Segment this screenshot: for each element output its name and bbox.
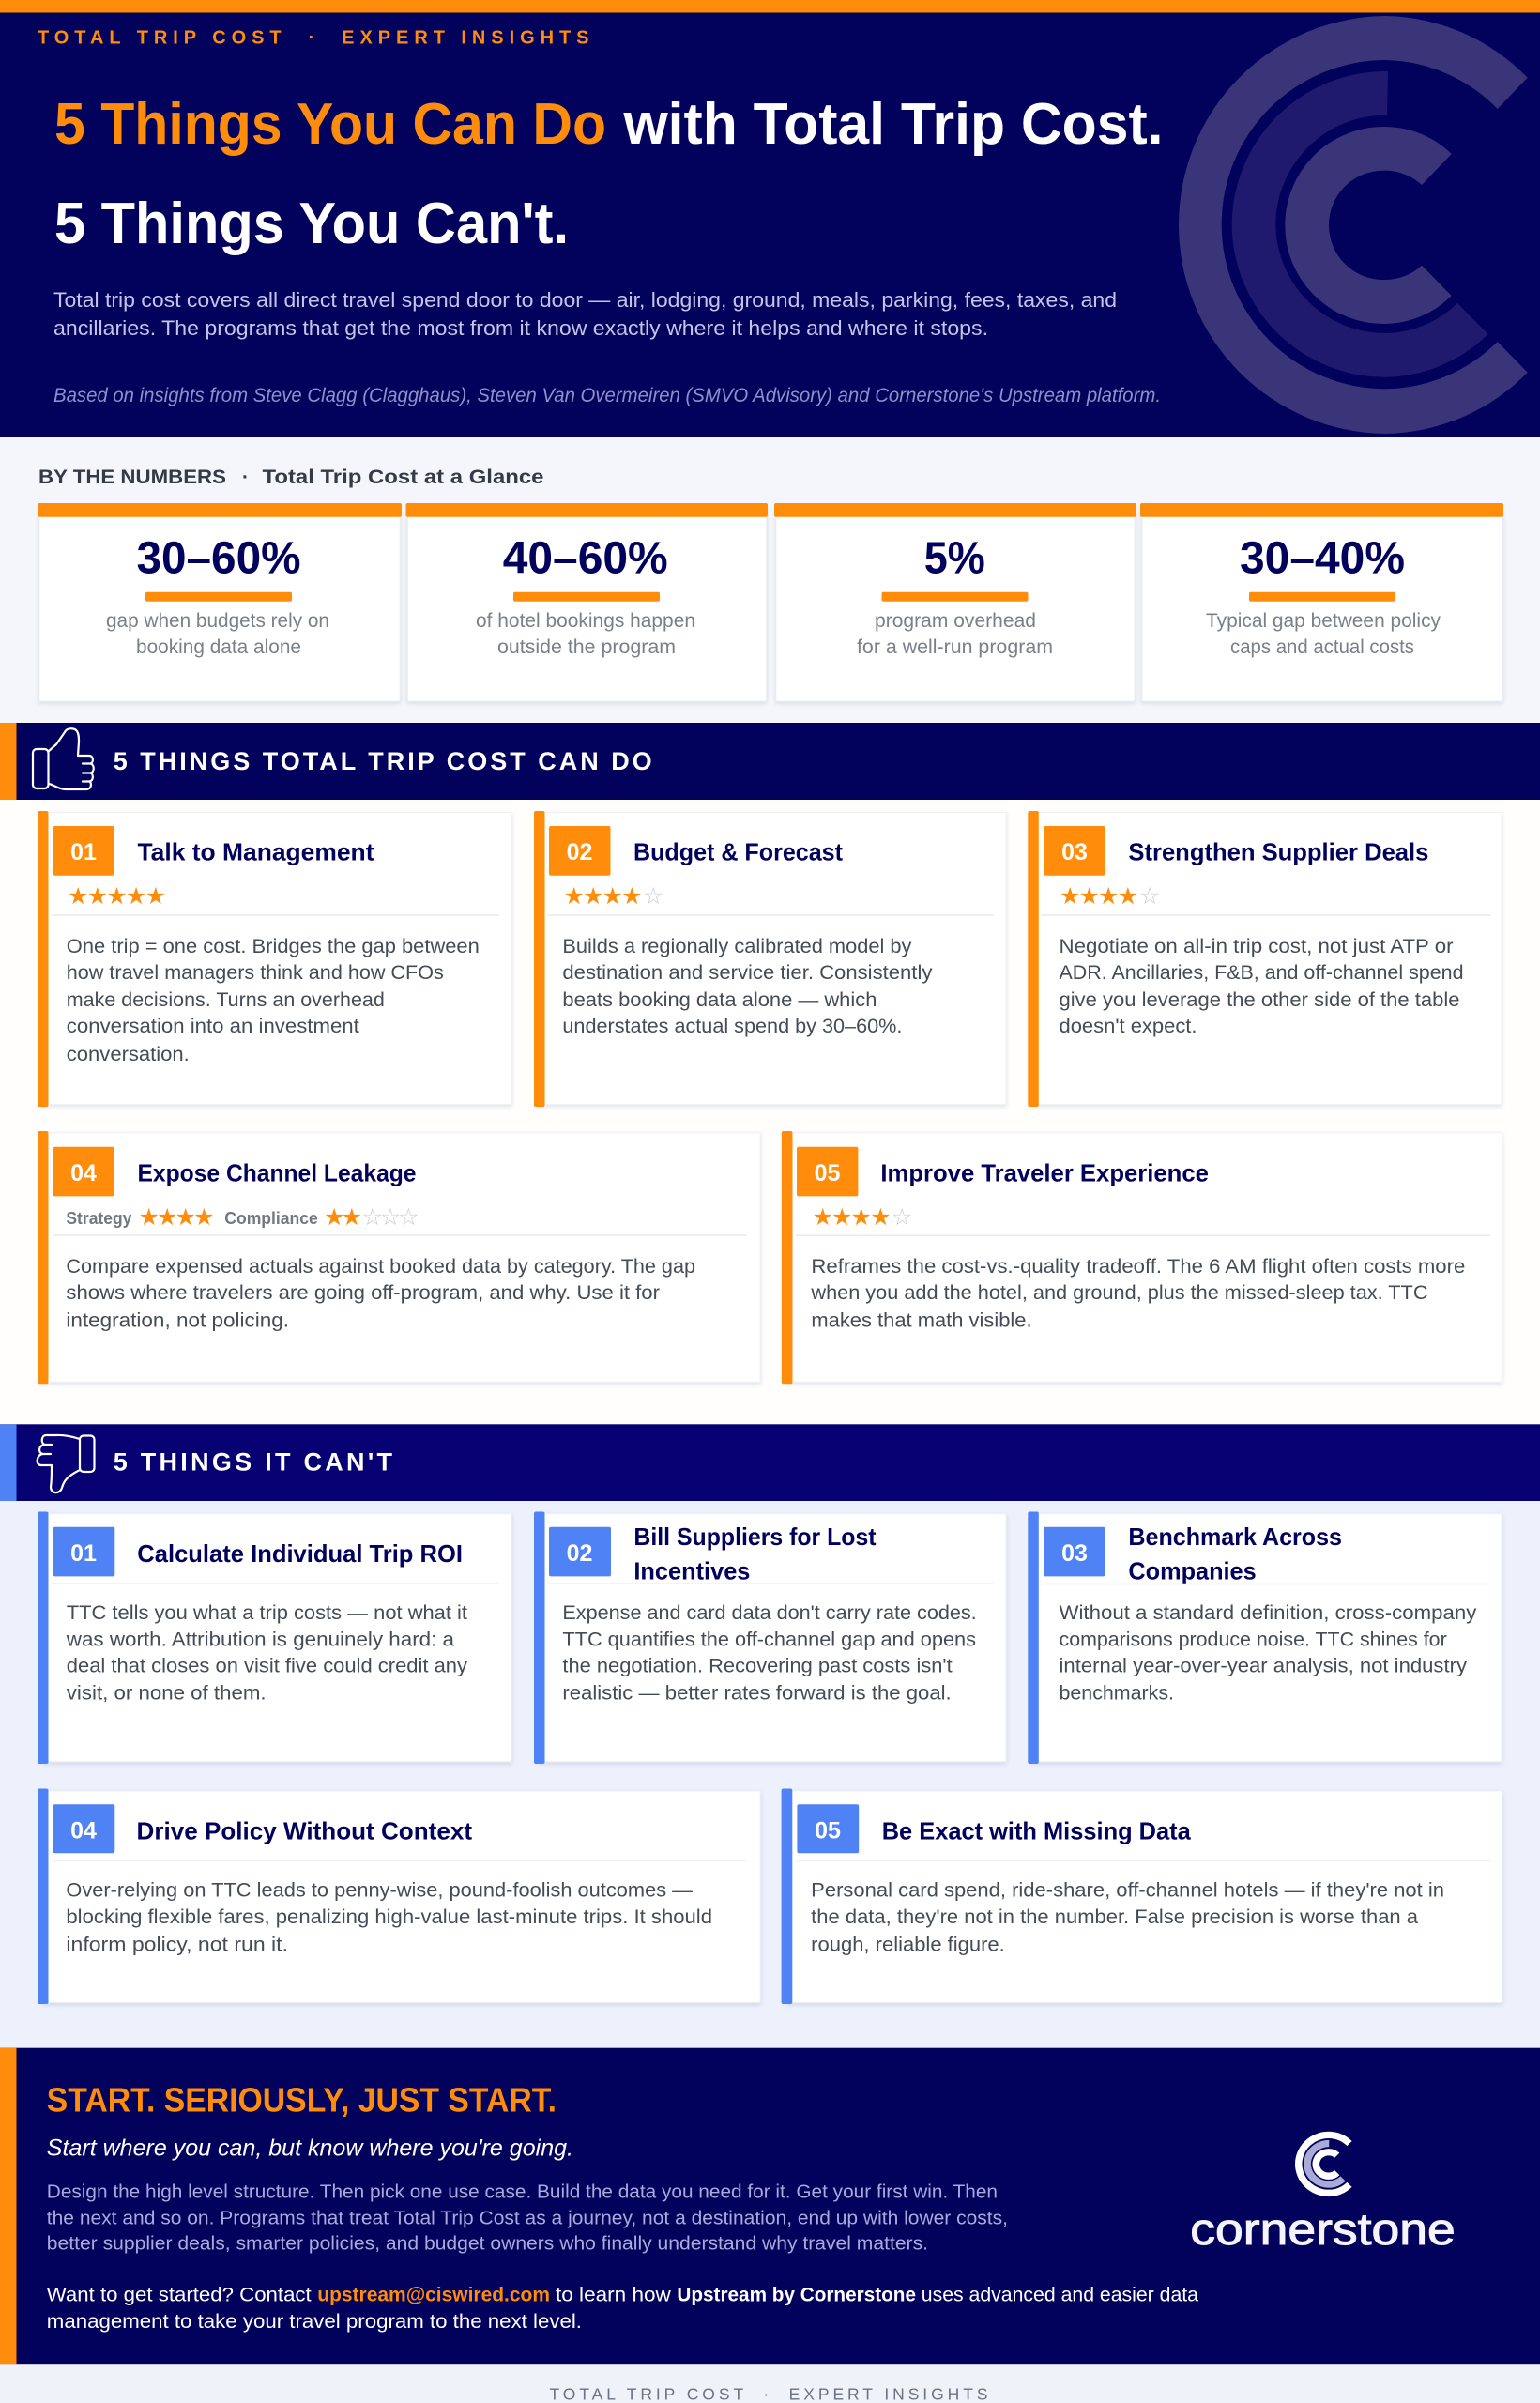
intro text: ancillaries. The programs that get the most from it know exactly where it helps and where it stops. — [53, 316, 988, 340]
card: benchmark across companies: benchmarks. — [1059, 1683, 1174, 1705]
card: benchmark across companies: Without a standard definition, cross-company — [1059, 1602, 1477, 1624]
title: with Total Trip Cost. — [623, 92, 1164, 157]
card: expose channel leakage: Compliance — [224, 1209, 318, 1228]
card: improve traveler experience: makes that math visible. — [811, 1309, 1032, 1331]
card: improve traveler experience: Reframes the cost-vs.-quality tradeoff. The 6 AM flight often costs more — [811, 1256, 1465, 1278]
attribution: Based on insights from Steve Clagg (Clagghaus), Steven Van Overmeiren (SMVO Advisory) and Cornerstone's Upstream platform. — [53, 385, 1161, 406]
card: strengthen supplier deals: Strengthen Supplier Deals — [1128, 838, 1428, 866]
card: expose channel leakage: Expose Channel Leakage — [137, 1158, 417, 1186]
panel: call to action — [0, 2048, 1540, 2364]
card: talk to management: Talk to Management — [137, 838, 374, 866]
card: be exact with missing data: 05 — [815, 1817, 841, 1844]
stat: 40–60%: 40–60% — [503, 534, 668, 584]
footer — [0, 2364, 1540, 2403]
card: improve traveler experience: when you add the hotel, and ground, plus the missed-sleep tax. TTC — [810, 1282, 1428, 1304]
card: talk to management: 01 — [70, 839, 97, 865]
logo: cornerstone — [1190, 2132, 1456, 2254]
icon: thumbs down — [38, 1435, 94, 1492]
card: drive policy without context — [38, 1789, 760, 2004]
card: benchmark across companies: comparisons produce noise. TTC shines for — [1059, 1629, 1447, 1650]
card: drive policy without context: Over-relying on TTC leads to penny-wise, pound-foolish outcomes — — [66, 1879, 693, 1902]
section band: cannot do — [0, 1424, 1540, 1501]
card: talk to management: ★★★★★ — [68, 882, 166, 910]
card: improve traveler experience: Improve Traveler Experience — [880, 1158, 1209, 1186]
stat: 30–60%: gap when budgets rely on — [106, 610, 329, 632]
card: expose channel leakage: ★★★★ — [139, 1203, 214, 1231]
stat: 30–60% — [38, 503, 402, 701]
card: be exact with missing data: Be Exact with Missing Data — [882, 1817, 1191, 1845]
card: expose channel leakage: ★★ — [324, 1203, 362, 1231]
card: strengthen supplier deals: doesn't expect. — [1059, 1016, 1197, 1037]
stat: 30–40%: 30–40% — [1240, 534, 1405, 584]
contact text: to learn how — [556, 2285, 672, 2306]
contact text: Want to get started? Contact — [47, 2285, 312, 2306]
contact text: uses advanced and easier data — [922, 2285, 1198, 2306]
stat: 5%: for a well-run program — [857, 636, 1053, 658]
card: budget and forecast: Builds a regionally calibrated model by — [562, 936, 912, 957]
card: drive policy without context: inform policy, not run it. — [66, 1934, 288, 1955]
card: expose channel leakage: shows where travelers are going off-program, and why. Use it for — [66, 1282, 660, 1304]
heading: 5 THINGS TOTAL TRIP COST CAN DO — [114, 747, 652, 775]
card: budget and forecast — [534, 811, 1006, 1107]
cta paragraph — [47, 2181, 1008, 2255]
card: be exact with missing data: the data, they're not in the number. False precision is worse than a — [811, 1906, 1418, 1928]
cta subheading: Start where you can, but know where you're going. — [47, 2135, 573, 2162]
stat: 30–40% — [1140, 503, 1503, 701]
card: be exact with missing data — [782, 1789, 1502, 2004]
card: budget and forecast: 02 — [567, 839, 592, 865]
card: be exact with missing data: rough, reliable figure. — [811, 1934, 1005, 1955]
card: improve traveler experience: ☆ — [892, 1203, 912, 1231]
contact text: management to take your travel program to the next level. — [47, 2311, 582, 2333]
card: benchmark across companies — [1028, 1511, 1502, 1764]
cta paragraph: the next and so on. Programs that treat Total Trip Cost as a journey, not a destination, end up with lower costs, — [47, 2207, 1008, 2228]
card: talk to management — [38, 811, 511, 1107]
heading — [38, 467, 544, 488]
card: bill suppliers for lost incentives: Bill Suppliers for Lost — [633, 1523, 877, 1551]
stat: 30–40%: Typical gap between policy — [1206, 610, 1441, 632]
card: talk to management: how travel managers think and how CFOs — [67, 962, 444, 984]
card: calculate individual trip roi: visit, or none of them. — [67, 1683, 267, 1705]
card: budget and forecast: understates actual spend by 30–60%. — [562, 1016, 902, 1037]
card: improve traveler experience — [782, 1131, 1502, 1384]
card: bill suppliers for lost incentives: Incentives — [633, 1556, 750, 1584]
card: budget and forecast: Budget & Forecast — [633, 838, 843, 866]
card: benchmark across companies: 03 — [1061, 1540, 1088, 1567]
card: improve traveler experience: 05 — [815, 1160, 840, 1186]
card: calculate individual trip roi — [38, 1511, 511, 1764]
logo: cornerstone: cornerstone — [1190, 2204, 1456, 2254]
intro text: Total trip cost covers all direct travel spend door to door — air, lodging, ground, meals, parking, fees, taxes, and — [53, 288, 1117, 312]
card: benchmark across companies: internal year-over-year analysis, not industry — [1059, 1656, 1468, 1677]
card: strengthen supplier deals: Negotiate on all-in trip cost, not just ATP or — [1059, 936, 1454, 957]
cta paragraph: Design the high level structure. Then pick one use case. Build the data you need for it. Get your first win. Then — [47, 2181, 998, 2203]
eyebrow: TOTAL TRIP COST · EXPERT INSIGHTS — [38, 28, 593, 49]
card: drive policy without context: 04 — [70, 1817, 97, 1844]
card: drive policy without context: Drive Policy Without Context — [137, 1817, 472, 1845]
card: calculate individual trip roi: deal that closes on visit five could credit any — [67, 1656, 468, 1677]
card: strengthen supplier deals: give you leverage the other side of the table — [1059, 989, 1460, 1011]
card: be exact with missing data: Personal card spend, ride-share, off-channel hotels — if they're not in — [811, 1879, 1444, 1902]
panel: by the numbers — [38, 467, 1503, 701]
cta paragraph: better supplier deals, smarter policies, and budget owners who finally understand why travel matters. — [47, 2233, 928, 2255]
stat: 30–40%: caps and actual costs — [1230, 636, 1414, 658]
heading: · — [242, 467, 249, 488]
card: calculate individual trip roi: was worth. Attribution is genuinely hard: a — [66, 1629, 454, 1650]
panel: cannot do section — [0, 1424, 1540, 2048]
card: drive policy without context: blocking flexible fares, penalizing high-value last-minute trips. It should — [66, 1906, 712, 1928]
card: expose channel leakage: integration, not policing. — [66, 1309, 289, 1331]
title: 5 Things You Can Do — [54, 92, 606, 157]
card: calculate individual trip roi: 01 — [70, 1540, 97, 1567]
stat: 40–60%: outside the program — [497, 636, 676, 658]
cta heading: START. SERIOUSLY, JUST START. — [47, 2080, 557, 2119]
card: expose channel leakage: Compare expensed actuals against booked data by category. The gap — [66, 1256, 695, 1278]
card: budget and forecast: ☆ — [643, 882, 663, 910]
card: talk to management: One trip = one cost. Bridges the gap between — [67, 936, 480, 957]
card: bill suppliers for lost incentives: realistic — better rates forward is the goal. — [562, 1683, 952, 1705]
title — [54, 92, 1164, 256]
contact text: Upstream by Cornerstone — [677, 2285, 916, 2306]
contact text: upstream@ciswired.com — [317, 2285, 550, 2306]
intro text — [53, 288, 1117, 340]
stat: 30–60%: booking data alone — [136, 636, 301, 658]
section band: can do — [0, 723, 1540, 800]
card: strengthen supplier deals: ADR. Ancillaries, F&B, and off-channel spend — [1059, 962, 1464, 984]
card: expose channel leakage: 04 — [70, 1160, 97, 1186]
panel: can do section — [0, 723, 1540, 1425]
icon: large cornerstone watermark — [1179, 16, 1528, 434]
card: talk to management: conversation. — [67, 1044, 190, 1065]
card: bill suppliers for lost incentives: the negotiation. Recovering past costs isn't — [562, 1656, 953, 1677]
stat: 5%: 5% — [924, 534, 985, 584]
card: expose channel leakage: Strategy — [66, 1209, 131, 1228]
card: budget and forecast: ★★★★ — [563, 882, 642, 910]
heading: Total Trip Cost at a Glance — [263, 467, 544, 488]
card: benchmark across companies: Benchmark Across — [1128, 1523, 1342, 1551]
card: bill suppliers for lost incentives: 02 — [567, 1540, 592, 1567]
icon: thumbs up — [33, 728, 94, 789]
card: budget and forecast: beats booking data alone — which — [562, 989, 877, 1011]
title: 5 Things You Can't. — [54, 191, 569, 256]
card: calculate individual trip roi: Calculate Individual Trip ROI — [137, 1539, 463, 1568]
panel: hero header — [0, 0, 1540, 437]
contact text — [47, 2285, 1198, 2333]
card: bill suppliers for lost incentives — [534, 1511, 1006, 1764]
stat: 40–60%: of hotel bookings happen — [476, 610, 695, 632]
card: benchmark across companies: Companies — [1128, 1556, 1257, 1584]
card: bill suppliers for lost incentives: Expense and card data don't carry rate codes. — [562, 1602, 977, 1624]
card: talk to management: conversation into an investment — [67, 1016, 359, 1037]
card: expose channel leakage: ☆☆☆ — [362, 1203, 419, 1231]
card: budget and forecast: destination and service tier. Consistently — [562, 962, 933, 984]
stat: 5% — [774, 503, 1136, 701]
heading: BY THE NUMBERS — [38, 467, 226, 488]
card: strengthen supplier deals: ☆ — [1139, 882, 1160, 910]
card: strengthen supplier deals — [1028, 811, 1502, 1107]
card: bill suppliers for lost incentives: TTC quantifies the off-channel gap and opens — [562, 1629, 976, 1650]
stat: 30–60%: 30–60% — [137, 534, 300, 584]
heading: 5 THINGS IT CAN'T — [114, 1448, 392, 1477]
stat: 40–60% — [405, 503, 768, 701]
card: strengthen supplier deals: ★★★★ — [1060, 882, 1138, 910]
card: calculate individual trip roi: TTC tells you what a trip costs — not what it — [67, 1602, 467, 1624]
card: strengthen supplier deals: 03 — [1061, 839, 1088, 865]
stat: 5%: program overhead — [875, 610, 1036, 632]
card: talk to management: make decisions. Turns an overhead — [67, 989, 385, 1011]
card: expose channel leakage — [38, 1131, 760, 1384]
card: improve traveler experience: ★★★★ — [813, 1203, 892, 1231]
